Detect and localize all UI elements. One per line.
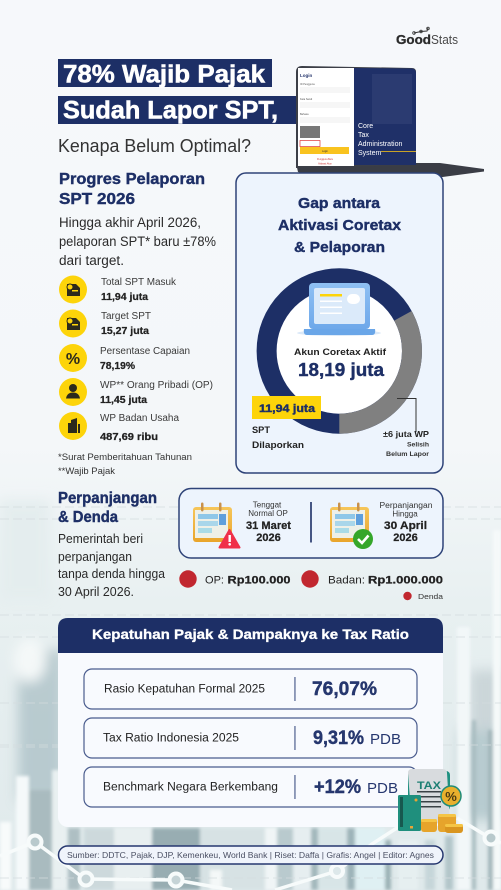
callout: SPT dilaporkan	[252, 396, 321, 451]
panel: kepatuhan pajak	[58, 618, 443, 827]
title: 78% Wajib Pajak	[63, 60, 265, 88]
legend: denda	[403, 592, 444, 601]
text: tenggat normal OP: 2026	[256, 532, 281, 544]
text: perpanjangan hingga: 30 April	[384, 520, 427, 532]
denda badan: Rp1.000.000	[368, 574, 443, 586]
donut chart	[267, 278, 412, 424]
title: Sudah Lapor SPT,	[63, 96, 278, 124]
row: tax ratio: Tax Ratio Indonesia 2025	[103, 732, 239, 744]
panel heading	[278, 195, 402, 256]
laptop: Coretax login screen	[296, 66, 484, 182]
source credits: Sumber: DDTC, Pajak, DJP, Kemenkeu, World Bank | Riset: Daffa | Grafis: Angel | Editor: Agnes	[67, 850, 434, 860]
text: perpanjangan hingga	[380, 501, 432, 544]
denda badan	[301, 570, 443, 588]
panel heading: Aktivasi Coretax	[278, 217, 402, 234]
background chart line	[0, 818, 501, 890]
text: perpanjangan summary: perpanjangan	[58, 550, 132, 564]
text: perpanjangan hingga: 2026	[393, 532, 418, 544]
row: benchmark	[84, 767, 417, 807]
heading: Perpanjangan & Denda: & Denda	[58, 509, 118, 526]
text: perpanjangan summary: tanpa denda hingga	[58, 567, 165, 581]
heading: Perpanjangan & Denda	[58, 490, 157, 526]
legend: denda: Denda	[418, 592, 444, 601]
heading: Progres Pelaporan SPT 2026: Progres Pelaporan	[59, 171, 205, 188]
stat: Total SPT Masuk: 11,94 juta	[101, 292, 148, 303]
callout: selisih belum lapor: Belum Lapor	[386, 451, 430, 458]
footnotes: **Wajib Pajak	[58, 466, 116, 476]
laptop: Coretax login screen: Login	[322, 150, 329, 153]
heading: Perpanjangan & Denda: Perpanjangan	[58, 490, 157, 507]
text: progress summary: pelaporan SPT* baru ±78%	[59, 234, 216, 249]
stat: Persentase Capaian: 78,19%	[100, 361, 135, 372]
row: benchmark: +12%	[314, 777, 361, 798]
callout: SPT dilaporkan: Dilaporkan	[252, 440, 304, 451]
callout: selisih belum lapor: Selisih	[407, 442, 429, 448]
callout: SPT dilaporkan: 11,94 juta	[259, 403, 316, 415]
denda OP: OP:	[205, 574, 224, 586]
row: rasio kepatuhan	[84, 669, 417, 709]
footnotes	[58, 452, 192, 476]
source credits	[58, 846, 443, 864]
title	[58, 59, 298, 156]
center label	[294, 347, 387, 380]
stat: WP Badan Usaha: WP Badan Usaha	[100, 413, 179, 424]
callout: selisih belum lapor	[383, 398, 430, 458]
icon: tax document, card and coins: TAX	[417, 780, 442, 792]
icon: tax document, card and coins	[398, 769, 463, 833]
text: tenggat normal OP: Normal OP	[248, 509, 288, 518]
stat: Persentase Capaian: %	[66, 351, 80, 368]
row: benchmark: Benchmark Negara Berkembang	[103, 782, 278, 794]
icon: calendar warning	[193, 502, 240, 548]
text: tenggat normal OP: 31 Maret	[246, 520, 291, 532]
title: Kenapa Belum Optimal?	[58, 136, 251, 156]
text: perpanjangan hingga: Perpanjangan	[380, 501, 432, 510]
heading: Progres Pelaporan SPT 2026	[59, 171, 205, 208]
icon: laptop	[297, 283, 381, 336]
row: tax ratio	[84, 718, 417, 758]
panel heading: & Pelaporan	[294, 239, 385, 256]
row: benchmark: PDB	[367, 780, 398, 797]
laptop: Coretax login screen: System	[358, 150, 382, 157]
stat: Total SPT Masuk	[59, 276, 177, 304]
callout: selisih belum lapor: ±6 juta WP	[383, 429, 429, 439]
stat: Target SPT: Target SPT	[101, 311, 151, 322]
row: rasio kepatuhan: Rasio Kepatuhan Formal 2025	[104, 684, 265, 696]
panel: gap aktivasi coretax dan pelaporan	[236, 173, 443, 473]
denda badan: Badan:	[328, 574, 365, 586]
denda OP	[179, 570, 290, 588]
stat: Persentase Capaian	[59, 344, 190, 372]
text: perpanjangan summary	[58, 532, 165, 599]
center label: Akun Coretax Aktif	[294, 347, 387, 358]
stat: WP Orang Pribadi: 11,45 juta	[100, 395, 147, 406]
laptop: Coretax login screen: Administration	[358, 141, 402, 148]
panel: kepatuhan pajak: Kepatuhan Pajak & Dampaknya ke Tax Ratio	[92, 626, 409, 642]
text: progress summary	[59, 215, 216, 268]
logo: GoodStats: Good	[396, 32, 431, 47]
laptop: Coretax login screen: ID Pengguna	[300, 83, 315, 86]
row: tax ratio: 9,31%	[313, 728, 364, 749]
stat: WP Badan Usaha	[59, 412, 179, 443]
laptop: Coretax login screen: Bahasa	[300, 113, 309, 116]
center label: 18,19 juta	[298, 359, 385, 380]
laptop: Coretax login screen: Login	[300, 73, 312, 78]
logo: GoodStats: Stats	[431, 32, 458, 47]
text: tenggat normal OP	[246, 500, 291, 544]
stat: WP Badan Usaha: 487,69 ribu	[100, 432, 158, 443]
denda OP: Rp100.000	[228, 574, 290, 586]
stat: WP Orang Pribadi: WP** Orang Pribadi (OP)	[100, 380, 213, 391]
stat: Total SPT Masuk: Total SPT Masuk	[101, 277, 177, 288]
text: tenggat normal OP: Tenggat	[253, 500, 282, 510]
laptop: Coretax login screen: Pengguna Baru	[317, 158, 334, 161]
text: progress summary: dari target.	[59, 253, 124, 268]
laptop: Coretax login screen: Core	[358, 123, 373, 130]
row: tax ratio: PDB	[370, 731, 401, 748]
panel: tenggat dates	[179, 488, 443, 558]
logo: GoodStats	[396, 27, 458, 47]
heading: Progres Pelaporan SPT 2026: SPT 2026	[59, 191, 135, 208]
panel heading: Gap antara	[298, 195, 381, 212]
laptop: Coretax login screen: Aktivasi Akun	[318, 162, 333, 166]
footnotes: *Surat Pemberitahuan Tahunan	[58, 452, 192, 462]
stat: WP Orang Pribadi	[59, 378, 213, 406]
icon: tax document, card and coins: %	[445, 789, 457, 804]
text: progress summary: Hingga akhir April 2026,	[59, 215, 201, 230]
callout: SPT dilaporkan: SPT	[252, 425, 270, 436]
laptop: Coretax login screen: Kata Sandi	[300, 98, 313, 101]
text: perpanjangan summary: 30 April 2026.	[58, 585, 134, 599]
text: perpanjangan hingga: Hingga	[392, 510, 418, 518]
icon: calendar check	[330, 502, 373, 549]
stat: Target SPT	[59, 310, 151, 338]
row: rasio kepatuhan: 76,07%	[312, 679, 377, 700]
stat: Target SPT: 15,27 juta	[101, 326, 149, 337]
stat: Persentase Capaian: Persentase Capaian	[100, 346, 190, 357]
laptop: Coretax login screen: Tax	[358, 132, 369, 139]
text: perpanjangan summary: Pemerintah beri	[58, 532, 143, 546]
